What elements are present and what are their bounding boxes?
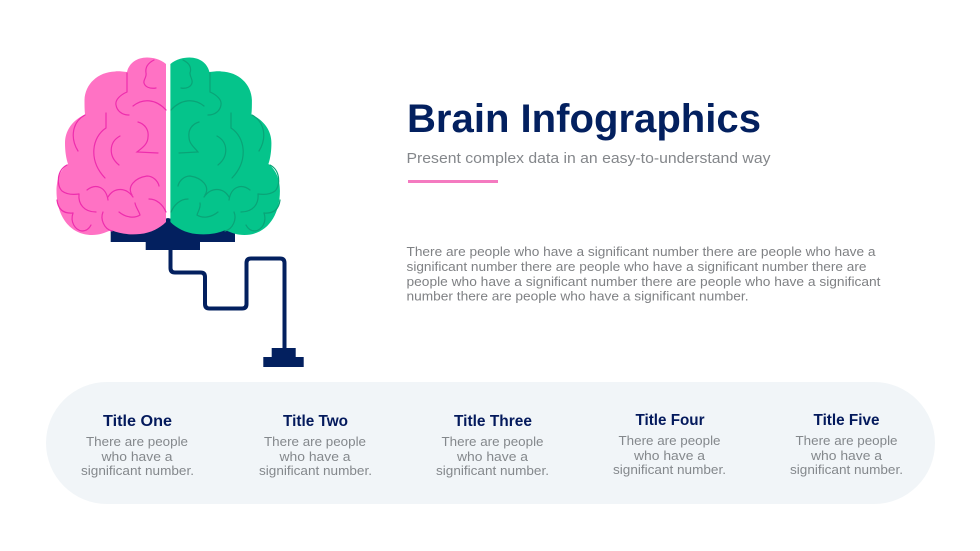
column: title three: who have a: [456, 450, 528, 464]
body paragraph: number there are people who have a significant number.: [406, 290, 748, 304]
brain illustration: [56, 58, 280, 250]
column: title three: significant number.: [436, 464, 549, 478]
subtitle: Present complex data in an easy-to-understand way: [406, 150, 771, 167]
connector cable: [170, 250, 284, 350]
body paragraph: [406, 245, 881, 304]
column: title two: who have a: [278, 450, 351, 464]
column: title three: There are people: [442, 435, 544, 449]
column: title two: There are people: [264, 435, 366, 449]
column: title five: who have a: [810, 449, 882, 463]
column: title five: There are people: [796, 434, 898, 448]
body paragraph: There are people who have a significant number there are people who have a: [406, 245, 876, 259]
title: Brain Infographics: [407, 97, 761, 141]
brain base stand: [111, 218, 235, 250]
body paragraph: people who have a significant number there are people who have a significant: [406, 275, 881, 289]
column: title four: [613, 412, 726, 477]
right brain hemisphere: green: [170, 58, 280, 235]
column: title one: who have a: [100, 450, 173, 464]
pink brain folds: [57, 60, 166, 231]
body paragraph: significant number there are people who have a significant number there are: [406, 260, 867, 274]
column: title three: Title Three: [454, 413, 532, 430]
panel: titles pill: [46, 382, 935, 504]
column: title five: significant number.: [790, 463, 903, 477]
column: title one: [81, 413, 194, 478]
column: title five: [790, 412, 903, 477]
cable foot connector: [263, 348, 304, 367]
left brain hemisphere: pink: [56, 58, 166, 235]
column: title two: [259, 413, 372, 478]
green brain folds: [171, 60, 280, 231]
column: title two: Title Two: [283, 413, 348, 430]
column: title five: Title Five: [814, 412, 880, 429]
column: title three: [436, 413, 549, 478]
column: title one: significant number.: [81, 464, 194, 478]
column: title two: significant number.: [259, 464, 372, 478]
column: title one: Title One: [103, 413, 172, 430]
column: title four: significant number.: [613, 463, 726, 477]
column: title one: There are people: [86, 435, 188, 449]
column: title four: Title Four: [636, 412, 704, 429]
column: title four: There are people: [618, 434, 721, 448]
column: title four: who have a: [633, 449, 705, 463]
pink accent rule: [408, 180, 498, 183]
